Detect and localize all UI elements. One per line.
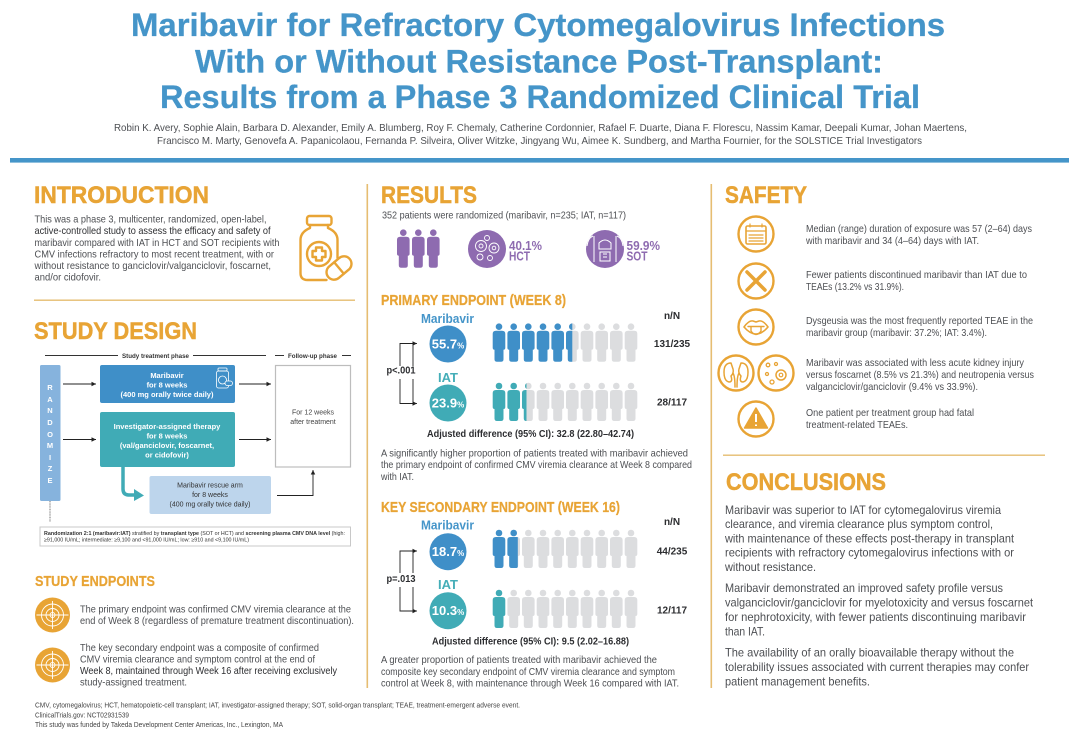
- footnotes: CMV, cytomegalovirus; HCT, hematopoietic-cell transplant; IAT, investigator-assigned therapy; SOT, solid-organ transplant; TEAE, treatment-emergent adverse event.: [35, 702, 520, 710]
- randomize bar: I: [49, 453, 51, 462]
- p value bracket: p<.001: [386, 366, 416, 376]
- text: conclusion 1: without resistance.: [724, 560, 816, 574]
- box: maribavir rescue arm: (400 mg orally twice daily): [170, 502, 250, 508]
- icon: target 2: [35, 648, 70, 682]
- icon: medicine bottle and pill: [300, 216, 355, 283]
- icon: mouth and tongue: [738, 310, 774, 344]
- text: secondary result: A greater proportion of patients treated with maribavir achieved the: [381, 654, 657, 666]
- text: conclusion 3: [725, 646, 1029, 688]
- panel: study design: [34, 318, 351, 546]
- maribavir label and stat: [421, 518, 474, 570]
- box: follow-up: [276, 366, 350, 467]
- randomize bar: A: [47, 395, 53, 404]
- icon: SOT organs: [586, 230, 624, 268]
- text: conclusion 2: for nephrotoxicity, with fewer patients discontinuing maribavir: [725, 610, 1026, 624]
- n/N values: [654, 311, 691, 408]
- footnotes: This study was funded by Takeda Development Center Americas, Inc., Lexington, MA: [35, 722, 283, 729]
- IAT label and stat: [430, 370, 466, 422]
- IAT label and stat: 10.3%: [432, 603, 464, 618]
- title: Maribavir for Refractory Cytomegalovirus Infections: [131, 7, 945, 43]
- pictogram: IAT 23.9%: [493, 383, 637, 421]
- box: investigator-assigned therapy arm: for 8 weeks: [147, 432, 187, 440]
- heading: safety: SAFETY: [725, 182, 807, 209]
- IAT label and stat: 23.9%: [432, 396, 464, 410]
- box: investigator-assigned therapy arm: Investigator-assigned therapy: [114, 422, 221, 431]
- text: discontinued: TEAEs (13.2% vs 31.9%).: [806, 281, 904, 293]
- text: exposure: Median (range) duration of exposure was 57 (2–64) days: [806, 223, 1032, 235]
- randomization note: Randomization 2:1 (maribavir:IAT) stratified by transplant type (SOT or HCT) and screening plasma CMV DNA level (high:: [44, 531, 345, 537]
- pictogram: maribavir 18.7%: [493, 530, 637, 568]
- heading: study endpoints: STUDY ENDPOINTS: [35, 574, 155, 590]
- n/N values: 131/235: [654, 339, 691, 350]
- stat: SOT: [626, 239, 660, 264]
- maribavir label and stat: 18.7%: [432, 544, 464, 559]
- icon: neutrophil cells: [758, 356, 794, 390]
- text: dysgeusia: [806, 315, 1033, 339]
- study design flow diagram: [40, 354, 351, 546]
- text block: introduction: maribavir compared with IAT in HCT and SOT recipients with: [34, 237, 280, 249]
- text: primary endpoint: end of Week 8 (regardless of premature treatment discontinuation).: [80, 615, 354, 627]
- IAT label and stat: IAT: [438, 577, 458, 592]
- panel: safety: [718, 182, 1034, 436]
- text: primary result: A significantly higher proportion of patients treated with maribavir achieved: [381, 448, 688, 460]
- text: conclusion 3: The availability of an orally bioavailable therapy without the: [725, 646, 1014, 660]
- text: patients randomized: 352 patients were randomized (maribavir, n=235; IAT, n=117): [382, 210, 626, 222]
- text: conclusion 2: than IAT.: [725, 624, 765, 638]
- stat: HCT: [509, 239, 542, 264]
- randomize bar: O: [47, 430, 53, 439]
- text block: introduction: and/or cidofovir.: [34, 272, 101, 284]
- text: key secondary endpoint: The key secondary endpoint was a composite of confirmed: [80, 642, 319, 654]
- text: exposure: with maribavir and 34 (4–64) days with IAT.: [805, 235, 979, 247]
- text: secondary result: composite key secondary endpoint of CMV viremia clearance and symptom: [381, 666, 675, 678]
- text: key secondary endpoint: CMV viremia clearance and symptom control at the end of: [80, 654, 315, 666]
- text: fatal TEAEs: treatment-related TEAEs.: [806, 419, 908, 431]
- box: investigator-assigned therapy arm: or cidofovir): [145, 450, 189, 460]
- section: primary endpoint: [380, 293, 692, 483]
- stat: SOT: 59.9%: [626, 239, 660, 253]
- box: investigator-assigned therapy arm: (val/ganciclovir, foscarnet,: [120, 441, 214, 450]
- arrows: [50, 384, 313, 522]
- randomize bar: E: [47, 476, 53, 485]
- text: secondary result: control at Week 8, with maintenance through Week 16 compared with IAT.: [381, 678, 679, 690]
- heading: results: RESULTS: [381, 182, 477, 209]
- text: kidney injury and neutropenia: [806, 357, 1034, 393]
- text: fatal TEAEs: [806, 407, 974, 431]
- text: discontinued: [806, 269, 1027, 293]
- n/N values: 12/117: [657, 606, 687, 616]
- heading: key secondary endpoint: KEY SECONDARY ENDPOINT (WEEK 16): [381, 500, 620, 516]
- text: primary result: with IAT.: [380, 471, 414, 483]
- section: key secondary endpoint: [381, 500, 688, 690]
- text: conclusion 3: patient management benefits.: [725, 674, 870, 688]
- text: key secondary endpoint: study-assigned treatment.: [80, 676, 187, 688]
- heading: primary endpoint: PRIMARY ENDPOINT (WEEK 8): [381, 293, 566, 309]
- text: conclusion 1: Maribavir was superior to IAT for cytomegalovirus viremia: [725, 503, 1001, 517]
- text: discontinued: Fewer patients discontinued maribavir than IAT due to: [806, 269, 1027, 281]
- p value bracket: [386, 551, 417, 611]
- phase labels: Follow-up phase: [288, 354, 338, 360]
- icon: warning: [738, 402, 774, 436]
- box: maribavir arm: Maribavir: [150, 371, 184, 380]
- authors: Robin K. Avery, Sophie Alain, Barbara D. Alexander, Emily A. Blumberg, Roy F. Chemaly, Catherine Cordonnier, Rafael F. Duarte, Diana F. Florescu, Nassim Kamar, Deepali Kumar, Johan Maertens,: [114, 122, 967, 134]
- n/N values: [657, 517, 688, 616]
- title: [131, 7, 945, 115]
- heading: introduction: INTRODUCTION: [34, 182, 209, 209]
- randomization note: [40, 527, 350, 546]
- stat: SOT: SOT: [626, 250, 648, 264]
- randomize bar: R: [47, 383, 53, 392]
- randomize bar: D: [47, 418, 53, 427]
- box: follow-up: after treatment: [290, 419, 336, 426]
- randomize bar: Z: [48, 464, 53, 473]
- adjusted difference: Adjusted difference (95% CI): 32.8 (22.80–42.74): [427, 429, 634, 440]
- text: primary endpoint: [80, 604, 354, 627]
- icon: HCT cells: [468, 230, 506, 268]
- authors: Francisco M. Marty, Genovefa A. Papanicolaou, Fernanda P. Silveira, Oliver Witzke, Jingyang Wu, Aimee K. Sundberg, and Martha Fournier, for the SOLSTICE Trial Investigators: [157, 135, 922, 147]
- text: kidney injury and neutropenia: versus foscarnet (8.5% vs 21.3%) and neutropenia versus: [806, 369, 1034, 381]
- text block: introduction: without resistance to ganciclovir/valganciclovir, foscarnet,: [34, 260, 271, 272]
- box: maribavir arm: for 8 weeks: [147, 380, 187, 390]
- box: maribavir arm: [100, 365, 235, 403]
- heading: study design: STUDY DESIGN: [34, 318, 197, 345]
- maribavir label and stat: [421, 311, 474, 362]
- text: key secondary endpoint: [80, 642, 338, 688]
- box: follow-up: For 12 weeks: [292, 410, 335, 416]
- text: conclusion 1: [724, 503, 1015, 574]
- text: conclusion 3: tolerability issues associated with current therapies may confer: [725, 660, 1029, 674]
- box: maribavir rescue arm: [150, 476, 271, 514]
- text: primary result: [380, 448, 692, 483]
- text: primary result: the primary endpoint of confirmed CMV viremia clearance at Week 8 compared: [381, 459, 692, 471]
- text: kidney injury and neutropenia: Maribavir was associated with less acute kidney injury: [806, 357, 1025, 369]
- panel: results: [380, 182, 692, 690]
- panel: introduction: [34, 182, 355, 284]
- text: conclusion 1: with maintenance of these effects post-therapy in transplant: [724, 532, 1015, 546]
- n/N values: 28/117: [657, 398, 687, 408]
- panel: conclusions: [724, 469, 1034, 688]
- p value bracket: p=.013: [386, 574, 416, 585]
- IAT label and stat: [430, 577, 466, 629]
- text: dysgeusia: maribavir group (maribavir: 37.2%; IAT: 3.4%).: [806, 327, 987, 339]
- n/N values: n/N: [664, 311, 680, 322]
- text block: introduction: CMV infections refractory to most recent treatment, with or: [34, 248, 274, 260]
- phase labels: [45, 354, 351, 360]
- adjusted difference: Adjusted difference (95% CI): 9.5 (2.02–16.88): [432, 636, 629, 648]
- text: key secondary endpoint: Week 8, maintained through Week 16 after receiving exclusively: [80, 665, 338, 677]
- icon: three people: [397, 229, 440, 268]
- IAT label and stat: IAT: [438, 370, 458, 385]
- maribavir label and stat: 55.7%: [432, 336, 464, 352]
- maribavir label and stat: Maribavir: [421, 518, 474, 532]
- icon: cross: [738, 264, 774, 298]
- n/N values: 44/235: [657, 546, 688, 558]
- text: dysgeusia: Dysgeusia was the most frequently reported TEAE in the: [806, 315, 1033, 327]
- text block: introduction: This was a phase 3, multicenter, randomized, open-label,: [34, 214, 266, 226]
- phase labels: Study treatment phase: [122, 354, 190, 360]
- maribavir label and stat: Maribavir: [421, 311, 474, 326]
- text: primary endpoint: The primary endpoint was confirmed CMV viremia clearance at the: [80, 604, 351, 616]
- pictogram: IAT 10.3%: [493, 590, 637, 628]
- footnotes: ClinicalTrials.gov: NCT02931539: [35, 712, 129, 720]
- box: maribavir arm: (400 mg orally twice daily): [121, 390, 214, 399]
- randomize bar: [40, 365, 60, 501]
- title: With or Without Resistance Post-Transplant:: [195, 44, 883, 80]
- icon: calendar: [738, 216, 774, 252]
- text: conclusion 1: recipients with refractory cytomegalovirus infections with or: [725, 546, 1014, 560]
- icon: target 1: [35, 598, 70, 632]
- icon: kidneys: [718, 356, 754, 390]
- footnotes: [35, 702, 520, 729]
- panel: study endpoints: [35, 574, 354, 688]
- text: kidney injury and neutropenia: valganciclovir/ganciclovir (9.4% vs 33.9%).: [806, 381, 978, 393]
- heading: conclusions: CONCLUSIONS: [726, 469, 886, 496]
- text block: introduction: [34, 214, 280, 284]
- text: conclusion 2: [725, 581, 1034, 638]
- randomization note: ≥91,000 IU/mL; intermediate: ≥9,100 and <91,000 IU/mL; low: ≥910 and <9,100 IU/mL): [44, 538, 249, 544]
- stat: HCT: 40.1%: [509, 239, 542, 253]
- text: conclusion 1: clearance, and viremia clearance plus symptom control,: [725, 517, 993, 531]
- text: conclusion 2: Maribavir demonstrated an improved safety profile versus: [725, 581, 1003, 595]
- text block: introduction: active-controlled study to assess the efficacy and safety of: [34, 225, 271, 237]
- n/N values: n/N: [664, 517, 680, 528]
- authors: [114, 122, 967, 147]
- box: investigator-assigned therapy arm: [100, 412, 235, 467]
- text: conclusion 2: valganciclovir/ganciclovir for myelotoxicity and versus foscarnet: [725, 596, 1034, 610]
- text: secondary result: [381, 654, 679, 690]
- randomize bar: M: [47, 441, 53, 450]
- box: maribavir rescue arm: for 8 weeks: [192, 492, 228, 499]
- p value bracket: [386, 344, 417, 404]
- arrow: rescue: [123, 467, 144, 501]
- box: maribavir rescue arm: Maribavir rescue arm: [177, 482, 243, 490]
- stat: HCT: HCT: [509, 250, 530, 264]
- text: exposure: [805, 223, 1032, 247]
- text: fatal TEAEs: One patient per treatment group had fatal: [806, 407, 974, 419]
- title: Results from a Phase 3 Randomized Clinical Trial: [160, 79, 920, 115]
- randomize bar: N: [47, 406, 53, 415]
- pictogram: maribavir 55.7%: [493, 323, 637, 362]
